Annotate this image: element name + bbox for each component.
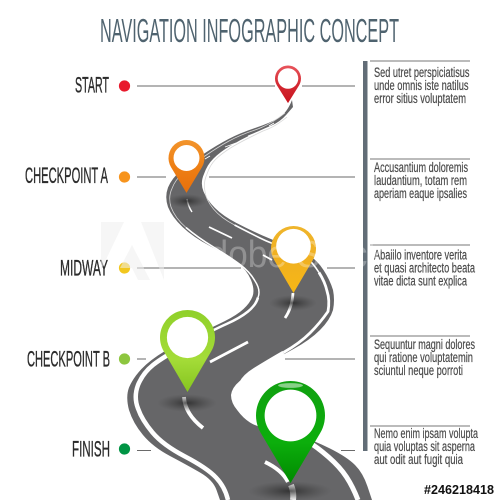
description: midway (370, 244, 475, 288)
vertical divider bar (363, 61, 368, 451)
stage labels: MIDWAY (60, 256, 108, 280)
pin: midway (yellow) (271, 226, 316, 293)
road surface (127, 100, 372, 500)
pin shadows (157, 194, 332, 500)
winding road (127, 100, 372, 500)
stock id: #246218418 (424, 482, 494, 497)
stock watermark (101, 222, 386, 280)
pin: finish (dark green) (256, 381, 325, 483)
stage dots (119, 80, 130, 455)
pin: checkpoint B (light green) (160, 310, 215, 392)
stage labels: CHECKPOINT B (27, 346, 110, 372)
description: checkpoint B: sciuntul neque porroti (374, 363, 463, 378)
pin: checkpoint A (orange) (168, 140, 204, 193)
centre dashes (184, 123, 293, 500)
watermark wordmark: Adobe Stock (185, 234, 386, 276)
pin: start (red) (275, 65, 301, 103)
right edge stripe (204, 117, 358, 500)
watermark logo (101, 222, 164, 280)
text column (370, 60, 478, 467)
left edge stripe (136, 113, 285, 500)
description: finish: aut odit aut fugit quia (374, 452, 463, 467)
infographic canvas: START (75, 72, 109, 98)
description: finish (370, 426, 478, 467)
stage labels: CHECKPOINT A (25, 163, 108, 188)
description: checkpoint B (370, 336, 475, 378)
connector lines (137, 86, 355, 450)
stage labels (25, 72, 110, 462)
description: start (370, 60, 470, 106)
stage labels: FINISH (72, 436, 110, 462)
description: checkpoint A (370, 158, 470, 201)
